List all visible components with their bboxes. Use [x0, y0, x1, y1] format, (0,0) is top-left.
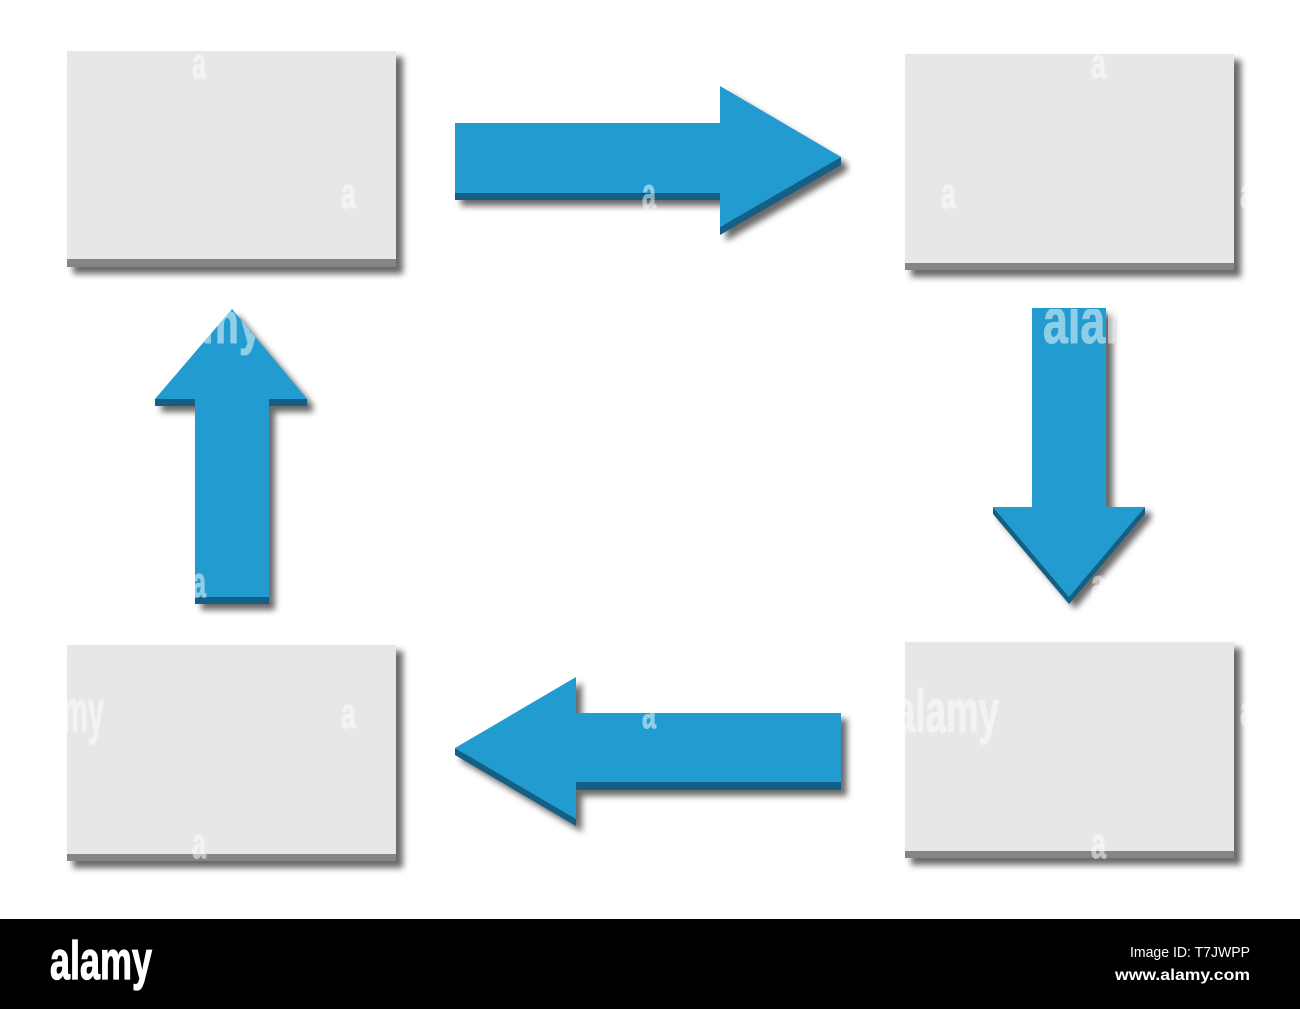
arrow: top, pointing right — [455, 86, 847, 241]
watermark letters: a — [1240, 687, 1256, 735]
watermark letters: a — [341, 690, 357, 738]
footer bar — [0, 919, 1300, 1009]
panel: bottom-right box — [905, 642, 1241, 865]
arrow: left, pointing up — [155, 309, 313, 610]
watermark letters: a — [1240, 170, 1256, 218]
panel: top-left box — [67, 51, 403, 274]
watermark letters: a — [192, 40, 207, 88]
arrow: bottom, pointing left — [455, 677, 847, 832]
watermark letters: a — [1091, 561, 1107, 609]
watermark letters: a — [1091, 40, 1107, 88]
watermark letters: a — [1091, 820, 1107, 868]
panel: bottom-left box — [67, 645, 403, 868]
arrow: right, pointing down — [993, 308, 1151, 609]
footer website: www.alamy.com — [1114, 967, 1250, 984]
watermark letters: a — [642, 690, 657, 738]
watermark letters: a — [192, 559, 207, 607]
watermark letters: alamy — [895, 678, 999, 745]
watermark letters: a — [941, 170, 957, 218]
watermark letters — [46, 40, 1256, 868]
footer image id: Image ID: T7JWPP — [1130, 944, 1250, 961]
watermark letters: a — [192, 820, 207, 868]
footer logo: alamy — [50, 931, 152, 991]
watermark letters: a — [642, 170, 657, 218]
watermark letters: alam — [1043, 285, 1145, 357]
panel: top-right box — [905, 54, 1241, 277]
watermark letters: a — [341, 170, 357, 218]
watermark letters: my — [202, 291, 262, 356]
watermark letters: amy — [46, 678, 104, 745]
